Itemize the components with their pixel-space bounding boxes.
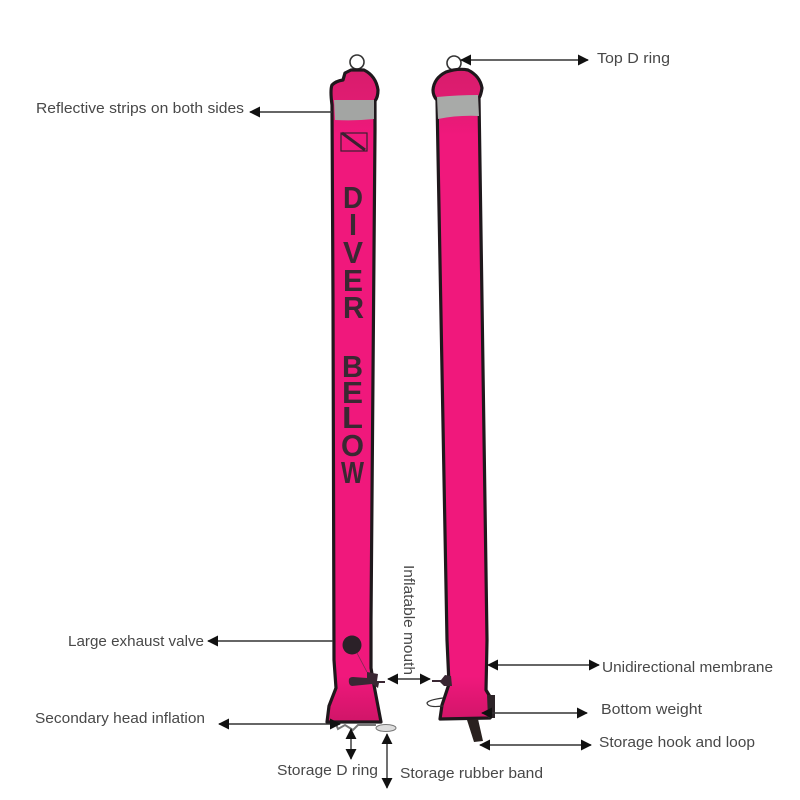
buoy lettering: DIVER: E xyxy=(343,263,363,298)
left buoy body xyxy=(327,70,381,722)
storage loop xyxy=(427,698,443,707)
right buoy: back view xyxy=(427,56,495,742)
buoy lettering: BELOW: O xyxy=(341,428,364,463)
buoy lettering: DIVER: I xyxy=(349,207,357,242)
label: Reflective strips on both sides: Reflective strips on both sides xyxy=(36,100,244,117)
inflation mouth fitting, right xyxy=(432,675,452,686)
buoy lettering: BELOW: B xyxy=(342,349,363,384)
label: Unidirectional membrane: Unidirectional membrane xyxy=(602,659,773,676)
label: Storage D ring: Storage D ring xyxy=(277,762,378,779)
bottom weight xyxy=(487,695,495,718)
buoy lettering: DIVER: D xyxy=(343,180,363,215)
reflective strip, right xyxy=(437,95,479,119)
label: Large exhaust valve: Large exhaust valve xyxy=(68,633,204,650)
label: Inflatable mouth: Inflatable mouth xyxy=(400,565,417,675)
label: Inflatable mouth xyxy=(388,565,430,679)
buoy lettering: BELOW: E xyxy=(342,375,363,410)
label: Top D ring: Top D ring xyxy=(597,50,670,67)
buoy lettering: DIVER: R xyxy=(343,290,364,325)
label: Storage rubber band: Storage rubber band xyxy=(400,765,543,782)
buoy lettering: DIVER xyxy=(343,180,364,325)
buoy lettering: BELOW xyxy=(341,349,365,490)
label: Bottom weight: Bottom weight xyxy=(601,701,703,718)
buoy lettering: BELOW: W xyxy=(341,455,365,490)
label: Storage hook and loop: Storage hook and loop xyxy=(599,734,755,751)
buoy lettering: BELOW: L xyxy=(342,400,363,435)
inflation mouth fitting, left xyxy=(349,653,385,688)
reflective strip, left xyxy=(334,100,374,120)
storage D ring and rubber band xyxy=(335,722,396,732)
icon: top D ring, right xyxy=(447,56,461,70)
buoy lettering: DIVER: V xyxy=(343,235,363,270)
icon: top D ring, left xyxy=(350,55,364,69)
icon: large exhaust valve xyxy=(342,636,362,654)
label: Secondary head inflation: Secondary head inflation xyxy=(35,710,205,727)
flag icon on buoy xyxy=(341,133,367,151)
storage hook strap xyxy=(467,719,483,742)
right buoy body xyxy=(433,69,492,719)
label: Storage D ring xyxy=(277,729,378,779)
left buoy: front view xyxy=(327,55,396,732)
